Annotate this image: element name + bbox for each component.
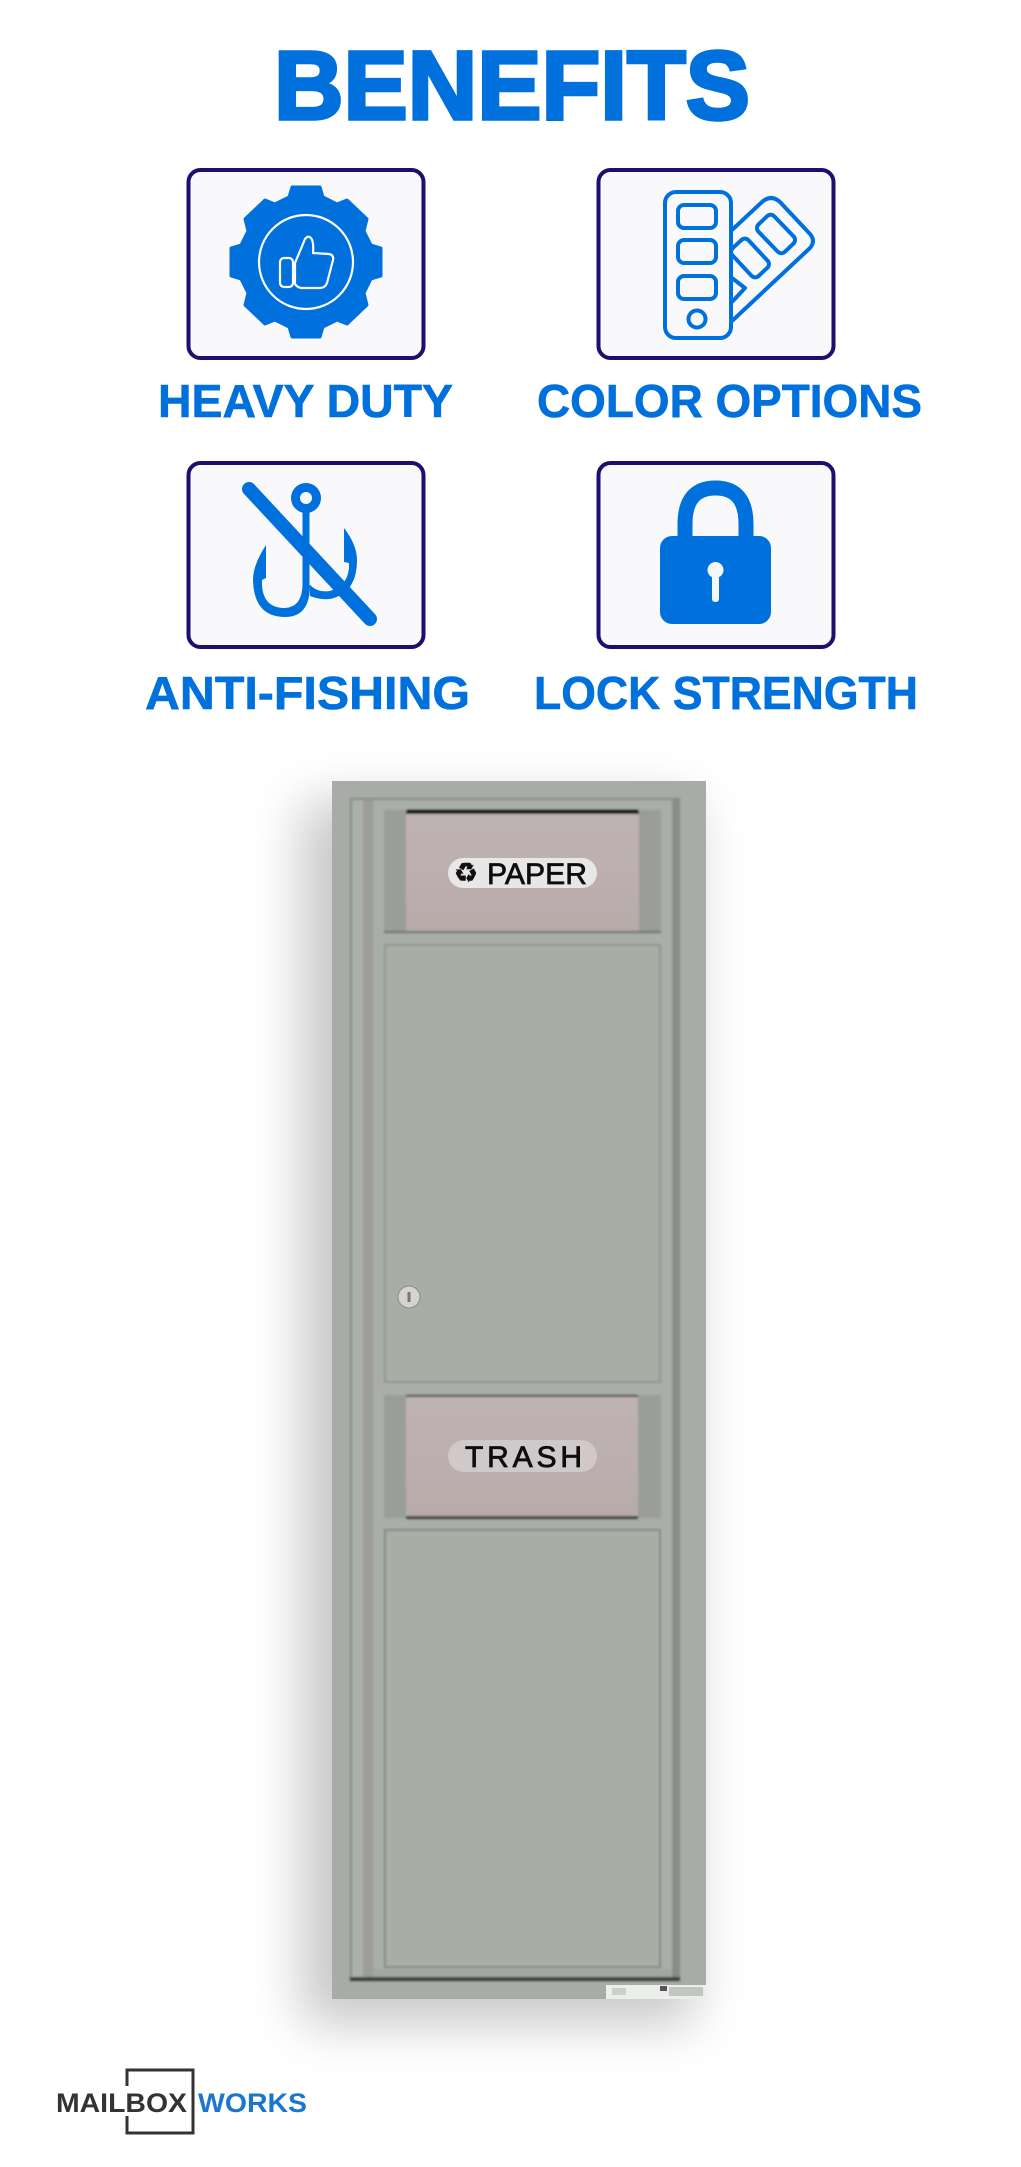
lower door [385, 1530, 660, 1967]
label: paper: ♻ [454, 858, 478, 889]
icon box: heavy duty [188, 170, 424, 358]
icon box: color options [598, 170, 834, 358]
icon box: lock strength [598, 463, 834, 647]
serial sticker [606, 1985, 706, 1999]
door lock [398, 1286, 420, 1308]
label: paper: PAPER [487, 858, 587, 891]
benefit: color options [537, 170, 922, 427]
label: heavy duty: HEAVY DUTY [158, 375, 453, 427]
benefit: heavy duty [158, 170, 453, 427]
icon box: anti-fishing [188, 463, 424, 647]
label: trash: TRASH [465, 1441, 582, 1474]
label: lock strength: LOCK STRENGTH [534, 667, 918, 719]
label: anti-fishing: ANTI-FISHING [145, 667, 470, 719]
icon: crossed-out fish hook [249, 488, 370, 619]
benefit: anti-fishing [145, 463, 470, 719]
icon: color swatch fan [665, 192, 813, 338]
logo: mailbox works: MAILBOX [56, 2088, 187, 2118]
title: BENEFITS [274, 31, 750, 140]
mailbox product [302, 781, 706, 2024]
label: color options: COLOR OPTIONS [537, 375, 922, 427]
benefit: lock strength [534, 463, 918, 719]
compartment: paper [384, 810, 661, 933]
label: paper [448, 858, 597, 891]
trash flap [406, 1396, 638, 1517]
outer frame [332, 781, 706, 1999]
paper flap [406, 812, 639, 932]
logo: mailbox works [56, 2070, 307, 2133]
icon: padlock [660, 488, 771, 624]
compartment: trash [384, 1395, 661, 1519]
upper door [385, 945, 660, 1382]
logo: mailbox works: WORKS [198, 2088, 307, 2118]
icon: gear with thumbs up [231, 187, 381, 337]
